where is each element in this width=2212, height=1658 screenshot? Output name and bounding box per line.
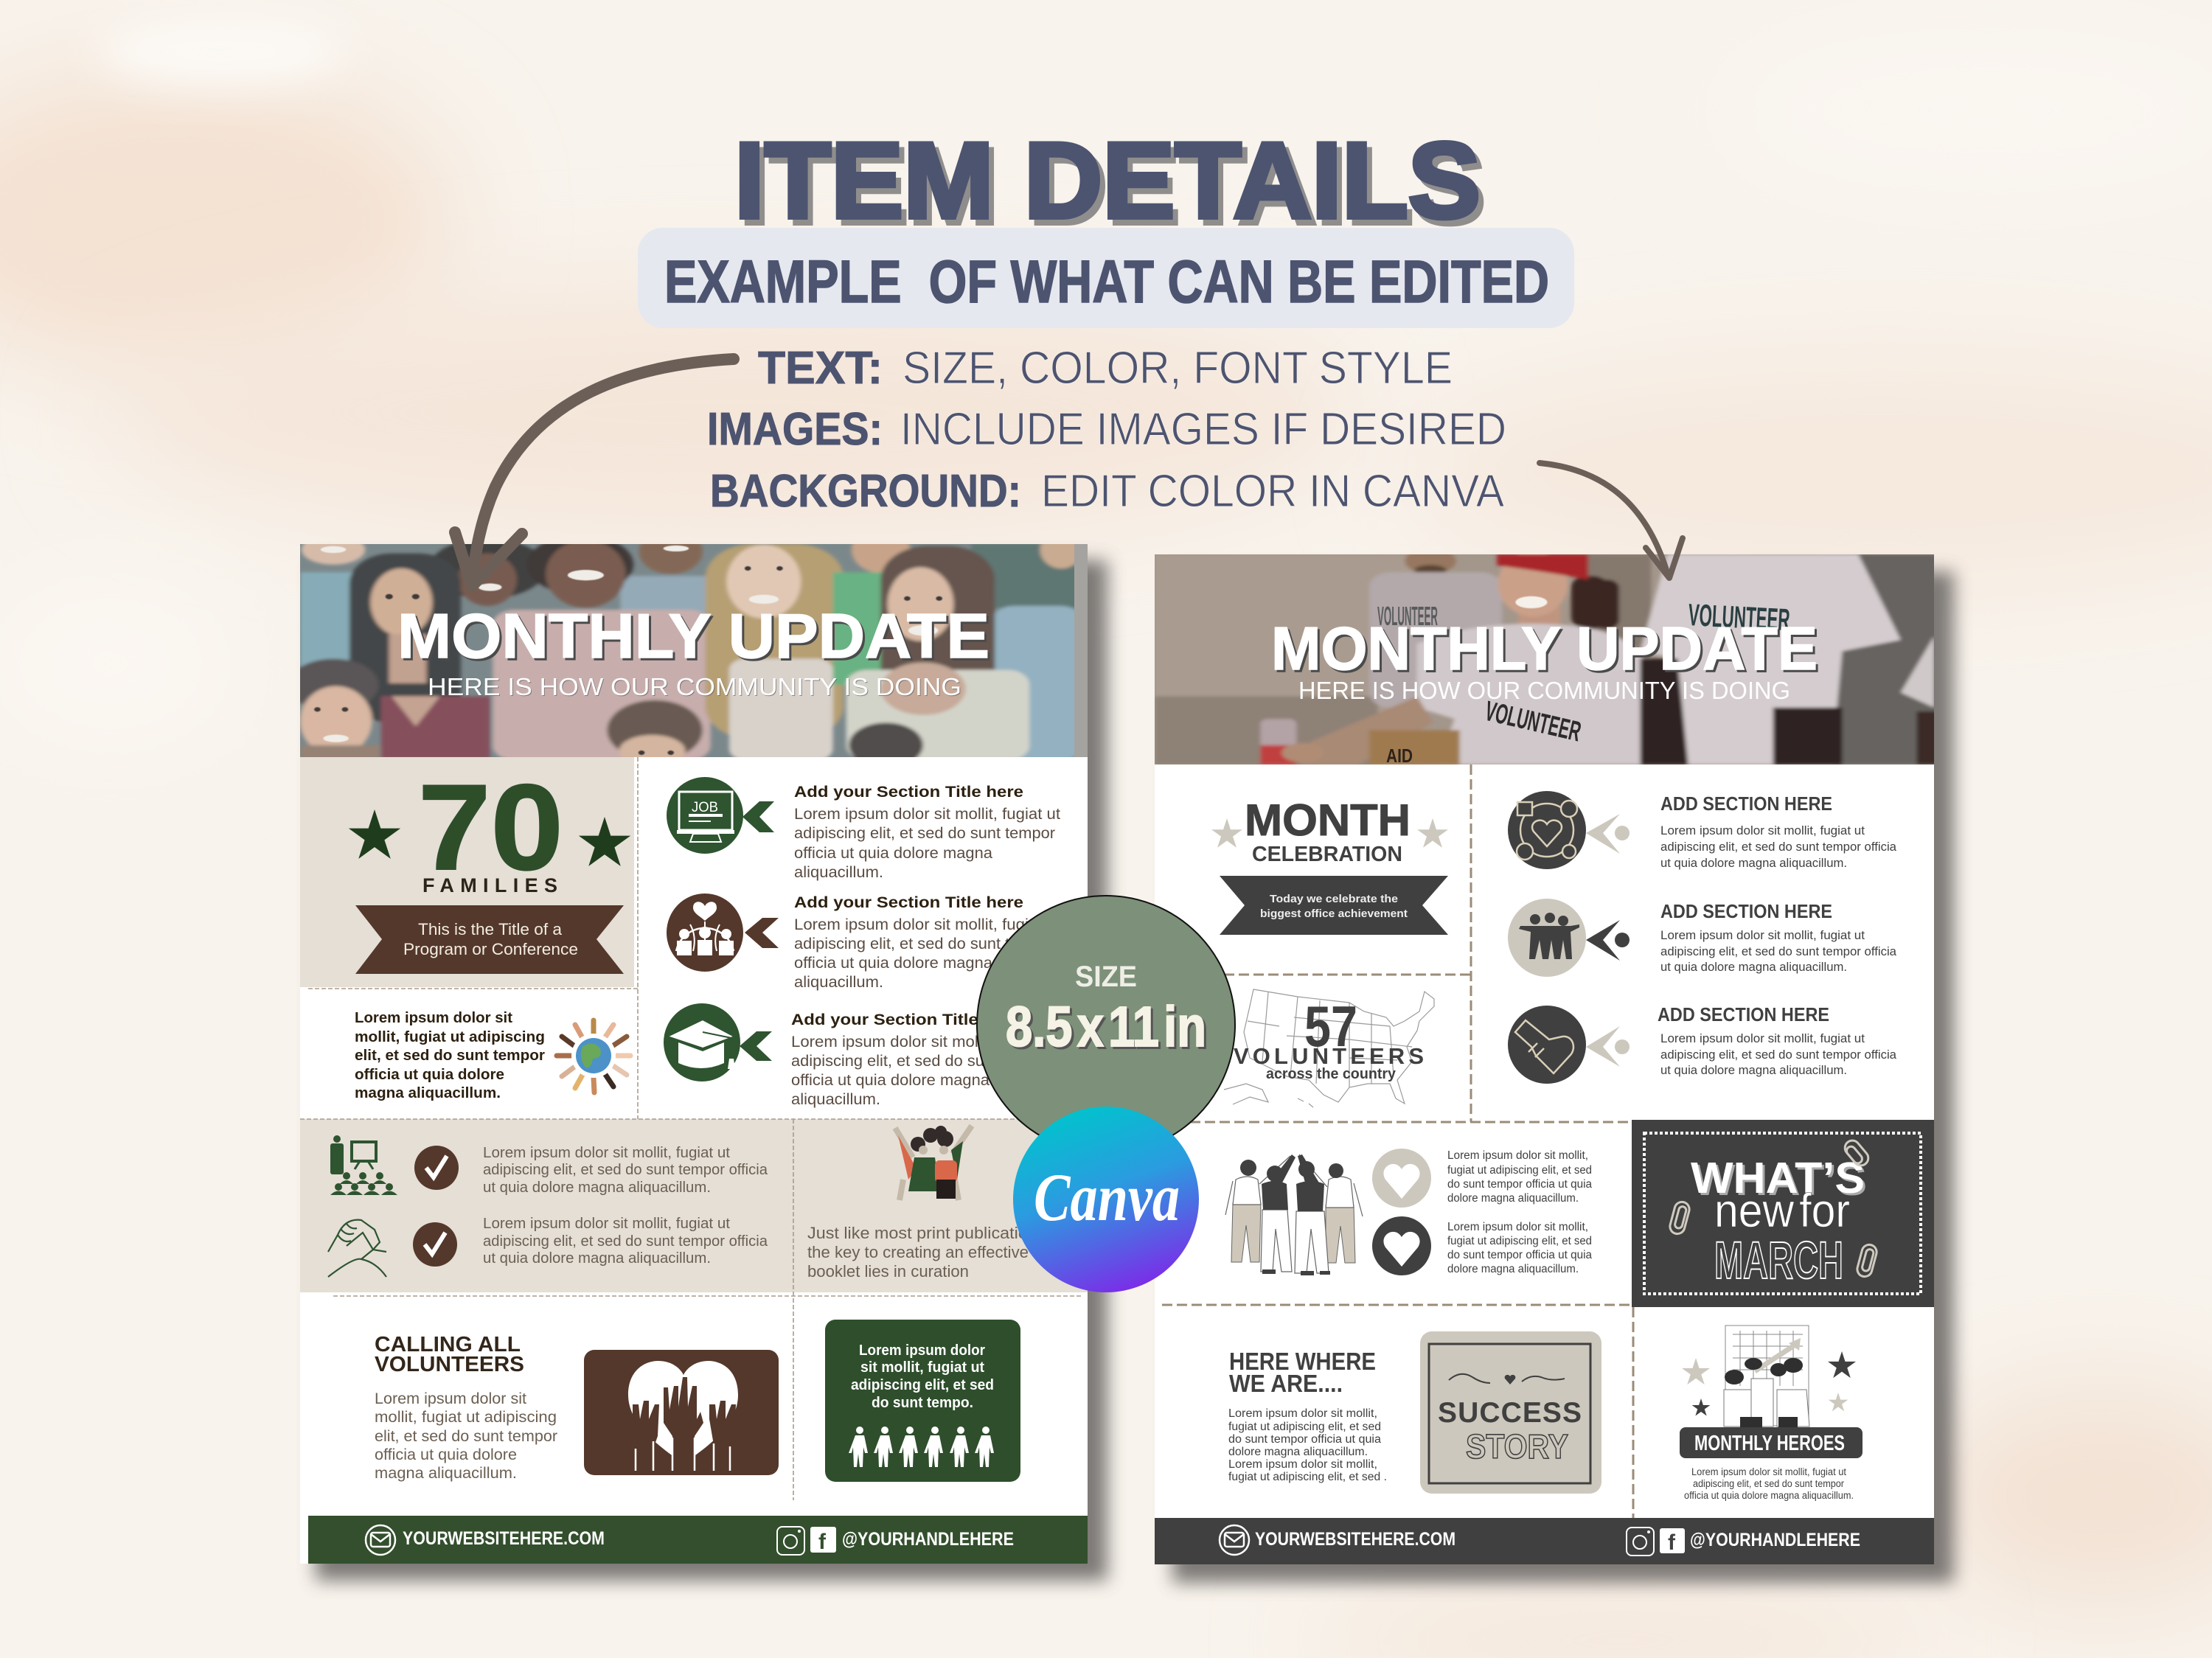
subtitle pill: EXAMPLE OF WHAT CAN BE EDITED (664, 248, 1549, 316)
heading: monthly update (397, 602, 992, 701)
editable feature list: BACKGROUND: (710, 466, 1021, 517)
illustration: monthly heroes: adipiscing elit, et sed do sunt tempor (1693, 1478, 1844, 1489)
text block: here where we are: dolore magna aliquacillum. (1228, 1446, 1368, 1458)
section item: giving (1508, 1003, 1897, 1084)
badge: size 8.5 x 11 in: SIZE (1075, 961, 1137, 993)
icon card: hands and heart (584, 1350, 779, 1475)
illustration: monthly heroes: officia ut quia dolore magna aliquacillum. (1684, 1490, 1854, 1501)
section item: education: aliquacillum. (791, 1091, 880, 1108)
icon: check circle (413, 1222, 457, 1267)
callout card: green: sit mollit, fugiat ut (860, 1359, 984, 1376)
callout card: green: adipiscing elit, et sed (851, 1377, 994, 1393)
panel: what's new for march: MARCH (1714, 1232, 1843, 1290)
heading: monthly update: MONTHLY UPDATE (397, 602, 990, 672)
text block: heart rows: dolore magna aliquacillum. (1447, 1192, 1579, 1205)
callout card: green (825, 1320, 1020, 1482)
text block: row one (483, 1145, 768, 1196)
section item: wellness: adipiscing elit, et sed do sunt tempor officia (1660, 840, 1897, 854)
panel: 57 volunteers with map: 57 (1304, 994, 1357, 1059)
section item: wellness: Lorem ipsum dolor sit mollit, fugiat ut (1660, 823, 1865, 837)
icon: presenter and audience (330, 1135, 397, 1195)
section item: wellness: ADD SECTION HERE (1660, 793, 1832, 815)
text block: heart rows: do sunt tempor officia ut quia (1447, 1249, 1592, 1261)
text block: volunteers (375, 1390, 557, 1482)
text block: volunteers: officia ut quia dolore (375, 1446, 517, 1463)
text block: here where we are: Lorem ipsum dolor sit mollit, (1228, 1407, 1377, 1420)
text block: bold intro: Lorem ipsum dolor sit (355, 1010, 512, 1026)
section item: team: ut quia dolore magna aliquacillum. (1660, 960, 1847, 974)
section item: community: Add your Section Title here (794, 894, 1023, 911)
heading: here where we are: WE ARE.... (1229, 1370, 1343, 1397)
editable feature list: SIZE, COLOR, FONT STYLE (902, 343, 1453, 394)
section item: job: Add your Section Title here (794, 784, 1023, 801)
icon: heart in beige circle (1372, 1149, 1431, 1208)
text block: curation note (807, 1224, 1051, 1281)
text block: bold intro: elit, et sed do sunt tempor (355, 1048, 545, 1064)
section item: community: aliquacillum. (794, 974, 883, 991)
arrow: background to right page (1540, 463, 1683, 578)
panel: 70 families: 70 (418, 759, 563, 895)
panel: 70 families: This is the Title of a (418, 920, 563, 938)
heading: monthly update: HERE IS HOW OUR COMMUNITY IS DOING (428, 673, 961, 700)
panel: 57 volunteers with map: across the country (1266, 1066, 1397, 1082)
icon: chevron with dot (1586, 920, 1630, 961)
icon: handshake (328, 1220, 386, 1277)
text block: row two: adipiscing elit, et sed do sunt tempor officia (483, 1233, 768, 1250)
section item: wellness (1508, 791, 1897, 870)
heading: monthly update: MONTHLY UPDATE (400, 604, 992, 674)
panel: 70 families (300, 757, 634, 987)
text block: bold intro (355, 1010, 545, 1101)
footer: right page: YOURWEBSITEHERE.COM (1255, 1529, 1455, 1550)
icon: job laptop (667, 777, 743, 854)
icon: chevron with dot (1586, 814, 1630, 854)
photo: volunteers in t-shirts (1155, 548, 1938, 767)
panel: 57 volunteers with map (1224, 989, 1434, 1107)
text block: here where we are (1228, 1407, 1387, 1483)
panel: what's new for march (1632, 1120, 1934, 1307)
text block: here where we are: fugiat ut adipiscing elit, et sed . (1228, 1471, 1387, 1483)
text block: volunteers: elit, et sed do sunt tempor (375, 1428, 557, 1445)
icon: paper clips (1669, 1138, 1878, 1278)
text block: curation note: the key to creating an effective (807, 1243, 1029, 1261)
heading: monthly update: MONTHLY UPDATE (1273, 616, 1820, 685)
text block: volunteers: mollit, fugiat ut adipiscing (375, 1409, 557, 1426)
icon: heart in dark circle (1372, 1216, 1431, 1275)
photo: volunteers in t-shirts: VOLUNTEER (1482, 696, 1584, 748)
icon: team huddle (1508, 899, 1586, 977)
subtitle pill (638, 228, 1574, 328)
heading: monthly update: HERE IS HOW OUR COMMUNITY IS DOING (1298, 677, 1790, 704)
text block: here where we are: Lorem ipsum dolor sit mollit, (1228, 1458, 1377, 1471)
photo: volunteers in t-shirts: VOLUNTEER (1377, 601, 1438, 631)
text block: bold intro: officia ut quia dolore (355, 1067, 504, 1083)
editable feature list: INCLUDE IMAGES IF DESIRED (900, 404, 1506, 455)
badge: size 8.5 x 11 in (977, 896, 1235, 1154)
heading: calling all volunteers: CALLING ALL (375, 1333, 521, 1356)
section item: team: Lorem ipsum dolor sit mollit, fugiat ut (1660, 928, 1865, 942)
icon: group of friends (895, 1126, 972, 1200)
panel: 70 families: Program or Conference (403, 940, 578, 958)
heading: here where we are: HERE WHERE (1229, 1348, 1376, 1375)
illustration: monthly heroes: MONTHLY HEROES (1694, 1432, 1845, 1455)
icon: chevron (740, 1031, 772, 1061)
text block: heart rows: Lorem ipsum dolor sit mollit, (1447, 1149, 1588, 1162)
card: success story: SUCCESS (1438, 1397, 1582, 1429)
section item: giving: adipiscing elit, et sed do sunt tempor officia (1660, 1048, 1897, 1062)
panel: 70 families: FAMILIES (422, 874, 557, 896)
text block: heart rows (1447, 1149, 1592, 1275)
heading: monthly update: HERE IS HOW OUR COMMUNITY IS DOING (428, 674, 962, 701)
text block: volunteers: Lorem ipsum dolor sit (375, 1390, 526, 1407)
heading: calling all volunteers: VOLUNTEERS (375, 1353, 524, 1376)
text block: heart rows: fugiat ut adipiscing elit, et sed (1447, 1235, 1592, 1247)
icon: check circle (414, 1146, 459, 1190)
section item: team: ADD SECTION HERE (1660, 900, 1832, 922)
title: ITEM DETAILS: ITEM DETAILS (740, 126, 1486, 246)
photo: crowd of smiling people (300, 544, 1074, 757)
section item: community: Lorem ipsum dolor sit mollit, fugiat ut (794, 916, 1060, 933)
callout card: green: Lorem ipsum dolor (859, 1342, 985, 1359)
icon: people under dome (667, 894, 743, 972)
footer: left page: YOURWEBSITEHERE.COM (403, 1528, 605, 1549)
text block: curation note: Just like most print publications, (807, 1224, 1051, 1242)
badge: size 8.5 x 11 in: 8.5 x 11 in (1008, 997, 1208, 1061)
section item: education: Lorem ipsum dolor sit mollit, fugiat ut (791, 1034, 1057, 1051)
text block: bold intro: mollit, fugiat ut adipiscing (355, 1029, 545, 1045)
illustration: monthly heroes: Lorem ipsum dolor sit mollit, fugiat ut (1691, 1466, 1846, 1477)
heading: here where we are (1229, 1348, 1376, 1397)
footer: right page: @YOURHANDLEHERE (1690, 1530, 1860, 1550)
section item: giving: ADD SECTION HERE (1658, 1003, 1829, 1025)
footer: right page (1155, 1518, 1934, 1564)
card: success story (1420, 1331, 1601, 1494)
shadow: left page (316, 560, 1107, 1581)
card: success story: STORY (1466, 1427, 1568, 1466)
panel: 57 volunteers with map: VOLUNTEERS (1234, 1043, 1424, 1069)
section item: giving: Lorem ipsum dolor sit mollit, fugiat ut (1660, 1031, 1865, 1045)
icon: graduation cap (664, 1003, 740, 1081)
shadow: right page (1172, 571, 1954, 1583)
footer: right page: f (1668, 1530, 1676, 1555)
panel: right newsletter (1155, 548, 1938, 1564)
text block: row two (483, 1216, 768, 1267)
section item: job: adipiscing elit, et sed do sunt tempor (794, 825, 1055, 842)
icon: chevron (745, 918, 779, 948)
icon: circle of care (1508, 791, 1586, 869)
section item: community: adipiscing elit, et sed do sunt tempor (794, 936, 1055, 952)
section item: community (667, 894, 1060, 991)
text block: row one: adipiscing elit, et sed do sunt tempor officia (483, 1162, 768, 1178)
panel: left newsletter (288, 526, 1088, 1564)
panel: month celebration: biggest office achievement (1260, 908, 1408, 920)
text block: row one: ut quia dolore magna aliquacillum. (483, 1180, 711, 1196)
badge: canva logo: Canva (1034, 1160, 1180, 1235)
section item: job: Lorem ipsum dolor sit mollit, fugiat ut (794, 806, 1060, 823)
editable feature list: EDIT COLOR IN CANVA (1041, 466, 1505, 517)
callout card: green: do sunt tempo. (872, 1395, 973, 1411)
editable feature list: TEXT: (758, 343, 883, 394)
panel: month celebration: Today we celebrate the (1270, 893, 1398, 905)
photo: volunteers in t-shirts: AID (1386, 745, 1413, 767)
text block: volunteers: magna aliquacillum. (375, 1465, 517, 1482)
text block: heart rows: fugiat ut adipiscing elit, et sed (1447, 1164, 1592, 1177)
section item: team: adipiscing elit, et sed do sunt tempor officia (1660, 944, 1897, 958)
footer: left page (308, 1516, 1088, 1564)
title: ITEM DETAILS: ITEM DETAILS (734, 120, 1481, 240)
icon: globe with hands (557, 1020, 630, 1093)
badge: size 8.5 x 11 in: 8.5 x 11 in (1006, 995, 1206, 1059)
photo: volunteers in t-shirts: VOLUNTEER (1688, 597, 1791, 637)
text block: heart rows: do sunt tempor officia ut quia (1447, 1178, 1592, 1191)
panel: what's new for march: new for (1714, 1184, 1850, 1237)
section item: education (664, 1003, 1057, 1108)
panel: what's new for march: WHAT’S (1691, 1154, 1865, 1202)
panel: month celebration (1211, 795, 1448, 935)
icon: chevron with dot (1586, 1026, 1630, 1067)
icon: chevron (742, 801, 774, 832)
section item: community: officia ut quia dolore magna (794, 955, 992, 972)
section item: education: officia ut quia dolore magna (791, 1072, 990, 1089)
arrow: text to left page (455, 359, 734, 586)
heading: calling all volunteers (375, 1333, 524, 1376)
heading: monthly update: MONTHLY UPDATE (1271, 614, 1818, 683)
text block: row one: Lorem ipsum dolor sit mollit, fugiat ut (483, 1145, 730, 1161)
badge: canva logo (1013, 1107, 1199, 1292)
editable feature list (707, 343, 1506, 517)
section item: giving: ut quia dolore magna aliquacillum. (1660, 1063, 1847, 1077)
icon: hand and heart (1508, 1006, 1586, 1084)
panel: what's new for march: WHAT’S (1693, 1156, 1867, 1205)
panel: month celebration: CELEBRATION (1252, 843, 1402, 866)
text block: heart rows: dolore magna aliquacillum. (1447, 1263, 1579, 1275)
footer: left page: @YOURHANDLEHERE (842, 1529, 1014, 1550)
text block: here where we are: fugiat ut adipiscing elit, et sed (1228, 1421, 1381, 1433)
panel: month celebration: MONTH (1245, 795, 1411, 845)
illustration: monthly heroes (1680, 1326, 1863, 1501)
section item: education: Add your Section Title here (791, 1011, 1020, 1028)
map: united states outline (1224, 989, 1434, 1107)
illustration: team high five (1225, 1154, 1363, 1275)
icon: job laptop: JOB (692, 800, 718, 815)
text block: bold intro: magna aliquacillum. (355, 1085, 501, 1101)
text block: curation note: booklet lies in curation (807, 1262, 969, 1281)
section item: job: aliquacillum. (794, 864, 883, 881)
section item: education: adipiscing elit, et sed do sunt tempor (791, 1053, 1052, 1070)
section item: job: officia ut quia dolore magna (794, 845, 992, 862)
footer: left page: f (818, 1530, 827, 1554)
text block: here where we are: do sunt tempor officia ut quia (1228, 1433, 1381, 1446)
section item: wellness: ut quia dolore magna aliquacillum. (1660, 856, 1847, 870)
text block: row two: ut quia dolore magna aliquacillum. (483, 1250, 711, 1267)
text block: row two: Lorem ipsum dolor sit mollit, fugiat ut (483, 1216, 730, 1232)
text block: heart rows: Lorem ipsum dolor sit mollit, (1447, 1221, 1588, 1233)
section item: job (667, 777, 1060, 881)
editable feature list: IMAGES: (707, 404, 883, 455)
section item: team (1508, 899, 1897, 977)
